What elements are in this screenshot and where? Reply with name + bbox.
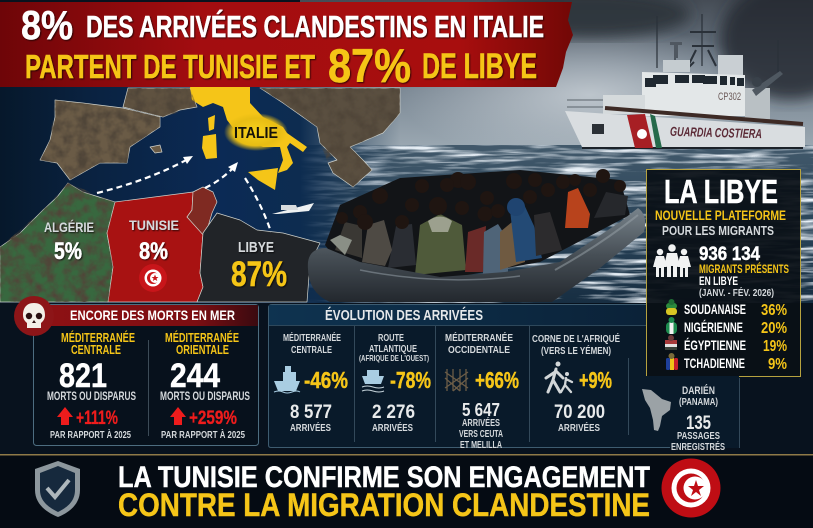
map land: Balearic islands xyxy=(150,145,162,153)
figure: migrants in Libya: EN LIBYE xyxy=(699,274,738,288)
column: Méditerranée centrale xyxy=(47,330,136,441)
nationality row: Tchadienne xyxy=(666,353,787,373)
conclusion text: LA TUNISIE CONFIRME SON ENGAGEMENT xyxy=(118,461,650,494)
panel: encore des morts en mer xyxy=(14,296,258,446)
map land: Corsica xyxy=(208,115,215,131)
label: Tunisie xyxy=(129,218,179,265)
column: Méditerranée occidentale: ET MELILLA xyxy=(460,440,502,451)
icon: skull xyxy=(14,296,54,336)
column: Méditerranée occidentale xyxy=(445,331,519,451)
map land: Libya region xyxy=(197,213,320,302)
label: Algérie xyxy=(44,220,94,265)
panel: La Libye xyxy=(646,170,800,376)
nationality row: Égyptienne xyxy=(665,335,787,355)
title line 2 xyxy=(25,39,537,92)
column: Méditerranée occidentale: ARRIVÉES xyxy=(462,416,500,429)
title line 1: DES ARRIVÉES CLANDESTINS EN ITALIE xyxy=(86,9,544,44)
map land: Spain xyxy=(40,100,160,180)
column: corne de l'Afrique: ARRIVÉES xyxy=(558,421,600,434)
map land: Sicily xyxy=(248,168,278,190)
column: route atlantique: ROUTE xyxy=(378,333,404,344)
column: Méditerranée centrale: MÉDITERRANÉE xyxy=(61,330,135,345)
figure: migrants in Libya xyxy=(699,244,789,299)
map labels xyxy=(44,125,287,294)
nationality row: Tchadienne: 9% xyxy=(768,356,787,373)
column: Méditerranée orientale: MORTS OU DISPARUS xyxy=(160,391,250,403)
ship text: hull name: GUARDIA COSTIERA xyxy=(670,124,762,141)
icon: walking adult and child xyxy=(546,362,572,392)
panel subheading xyxy=(655,208,786,238)
label: Libye: LIBYE xyxy=(238,240,274,256)
figure: migrants in Libya: (JANV. - FÉV. 2026) xyxy=(699,286,774,299)
icon: border fence xyxy=(445,369,468,391)
column: Méditerranée orientale: ORIENTALE xyxy=(176,343,229,357)
column: Darién xyxy=(642,384,725,453)
column: Méditerranée orientale: MÉDITERRANÉE xyxy=(165,330,239,345)
icon: boat on waves xyxy=(362,370,384,392)
conclusion band xyxy=(0,454,813,528)
icon: Tunisia flag xyxy=(662,458,720,518)
ship text: pennant number: CP302 xyxy=(718,91,741,103)
map land texture xyxy=(0,88,400,302)
column: Méditerranée centrale: +111% xyxy=(76,408,118,429)
column: Méditerranée occidentale: OCCIDENTALE xyxy=(448,344,510,356)
map land: Sardinia xyxy=(202,134,217,159)
column: route atlantique: 2 276 xyxy=(372,402,415,423)
map land: Algeria label region xyxy=(0,183,115,302)
panel subheading: POUR LES MIGRANTS xyxy=(662,223,774,238)
column: route atlantique: -78% xyxy=(390,367,431,393)
column: corne de l'Afrique xyxy=(532,332,620,434)
column: Méditerranée centrale: CENTRALE xyxy=(71,343,121,357)
column: Méditerranée orientale: PAR RAPPORT À 2025 xyxy=(161,428,245,441)
map land: France xyxy=(123,88,197,117)
conclusion text xyxy=(118,461,650,523)
title line 1 xyxy=(21,2,544,48)
label: Algérie: 5% xyxy=(54,238,82,265)
migrant rubber boat xyxy=(308,169,645,302)
boat crowd xyxy=(325,169,630,280)
panel heading: LA LIBYE xyxy=(664,173,778,210)
label: Tunisie: TUNISIE xyxy=(129,218,179,233)
column: Méditerranée occidentale: 5 647 xyxy=(462,400,500,420)
column: Méditerranée centrale: MORTS OU DISPARUS xyxy=(47,391,136,403)
column: corne de l'Afrique: 70 200 xyxy=(554,402,605,423)
Italy glow xyxy=(224,113,288,151)
nationality row: Nigérienne: NIGÉRIENNE xyxy=(684,320,743,335)
icon: people group xyxy=(653,244,691,277)
column: Méditerranée orientale: +259% xyxy=(189,408,237,429)
label: Italie: ITALIE xyxy=(234,125,278,142)
title line 2: 87% xyxy=(328,39,411,92)
column: Méditerranée occidentale: VERS CEUTA xyxy=(459,429,503,440)
column: Darién: ENREGISTRÉS xyxy=(671,440,725,453)
column: Méditerranée centrale: CENTRALE xyxy=(291,344,332,356)
icon: small boat on map xyxy=(272,203,314,214)
panel heading: ENCORE DES MORTS EN MER xyxy=(70,307,235,323)
column: route atlantique: ARRIVÉES xyxy=(372,421,413,434)
map land: Tunisia region xyxy=(187,187,217,237)
nationality row: Nigérienne: 20% xyxy=(761,320,787,337)
column: Méditerranée centrale: MÉDITERRANÉE xyxy=(283,331,341,344)
map land: Balkans and Greece xyxy=(260,88,400,187)
column: Méditerranée centrale: 821 xyxy=(59,357,107,395)
column: Darién: DARIÉN xyxy=(682,384,715,397)
column: route atlantique: ATLANTIQUE xyxy=(369,344,417,355)
nationality row: Égyptienne: 19% xyxy=(763,338,787,355)
conclusion text: CONTRE LA MIGRATION CLANDESTINE xyxy=(118,487,650,523)
icon: ship xyxy=(274,366,300,393)
column: Méditerranée centrale xyxy=(274,331,348,434)
label: Libye: 87% xyxy=(231,255,287,294)
label: Tunisie: 8% xyxy=(139,238,168,265)
label: Libye xyxy=(231,240,287,294)
figure: migrants in Libya: 936 134 xyxy=(699,244,760,265)
nationality row: Nigérienne xyxy=(666,317,787,337)
title line 1: 8% xyxy=(21,2,73,48)
map land: central red region xyxy=(107,192,203,302)
label: Algérie: ALGÉRIE xyxy=(44,220,94,235)
icon: shield with check xyxy=(35,461,80,517)
column: Méditerranée centrale: ARRIVÉES xyxy=(290,421,331,434)
icon: Tunisia flag on map xyxy=(139,264,167,292)
icon: South America map xyxy=(642,389,671,431)
nationality row: Tchadienne: TCHADIENNE xyxy=(684,356,745,371)
column: Méditerranée orientale: 244 xyxy=(170,357,220,395)
map land: Italy xyxy=(190,87,307,173)
coast guard ship xyxy=(565,14,805,149)
boat hull tube xyxy=(308,208,645,302)
title line 2: PARTENT DE TUNISIE ET xyxy=(25,48,315,85)
column: route atlantique: (AFRIQUE DE L'OUEST) xyxy=(359,353,429,363)
column: Méditerranée centrale: PAR RAPPORT À 2025 xyxy=(50,428,131,441)
column: Méditerranée centrale: -46% xyxy=(304,367,348,393)
panel: évolution des arrivées xyxy=(268,304,740,453)
column: corne de l'Afrique: (VERS LE YÉMEN) xyxy=(541,344,611,357)
map of the Mediterranean xyxy=(0,87,400,302)
title banner xyxy=(0,2,573,92)
nationality row: Égyptienne: ÉGYPTIENNE xyxy=(684,338,746,353)
column: Méditerranée centrale: 8 577 xyxy=(290,402,332,423)
column: Darién: PASSAGES xyxy=(677,431,720,442)
nationality row: Soudanaise: 36% xyxy=(761,302,787,319)
column: Darién: 135 xyxy=(686,413,711,434)
map arrows xyxy=(97,156,271,232)
column: corne de l'Afrique: CORNE DE L'AFRIQUÉ xyxy=(532,332,620,345)
column: Méditerranée orientale xyxy=(160,330,250,441)
column: Méditerranée occidentale: MÉDITERRANÉE xyxy=(445,331,513,344)
nationality row: Soudanaise xyxy=(666,299,787,319)
column: Méditerranée occidentale: +66% xyxy=(475,367,519,393)
column: route atlantique xyxy=(359,333,431,434)
column: corne de l'Afrique: +9% xyxy=(579,367,612,393)
column: Darién: (PANAMA) xyxy=(679,397,718,408)
nationality row: Soudanaise: SOUDANAISE xyxy=(684,302,746,317)
panel heading: ÉVOLUTION DES ARRIVÉES xyxy=(325,307,483,324)
title line 2: DE LIBYE xyxy=(422,47,537,86)
